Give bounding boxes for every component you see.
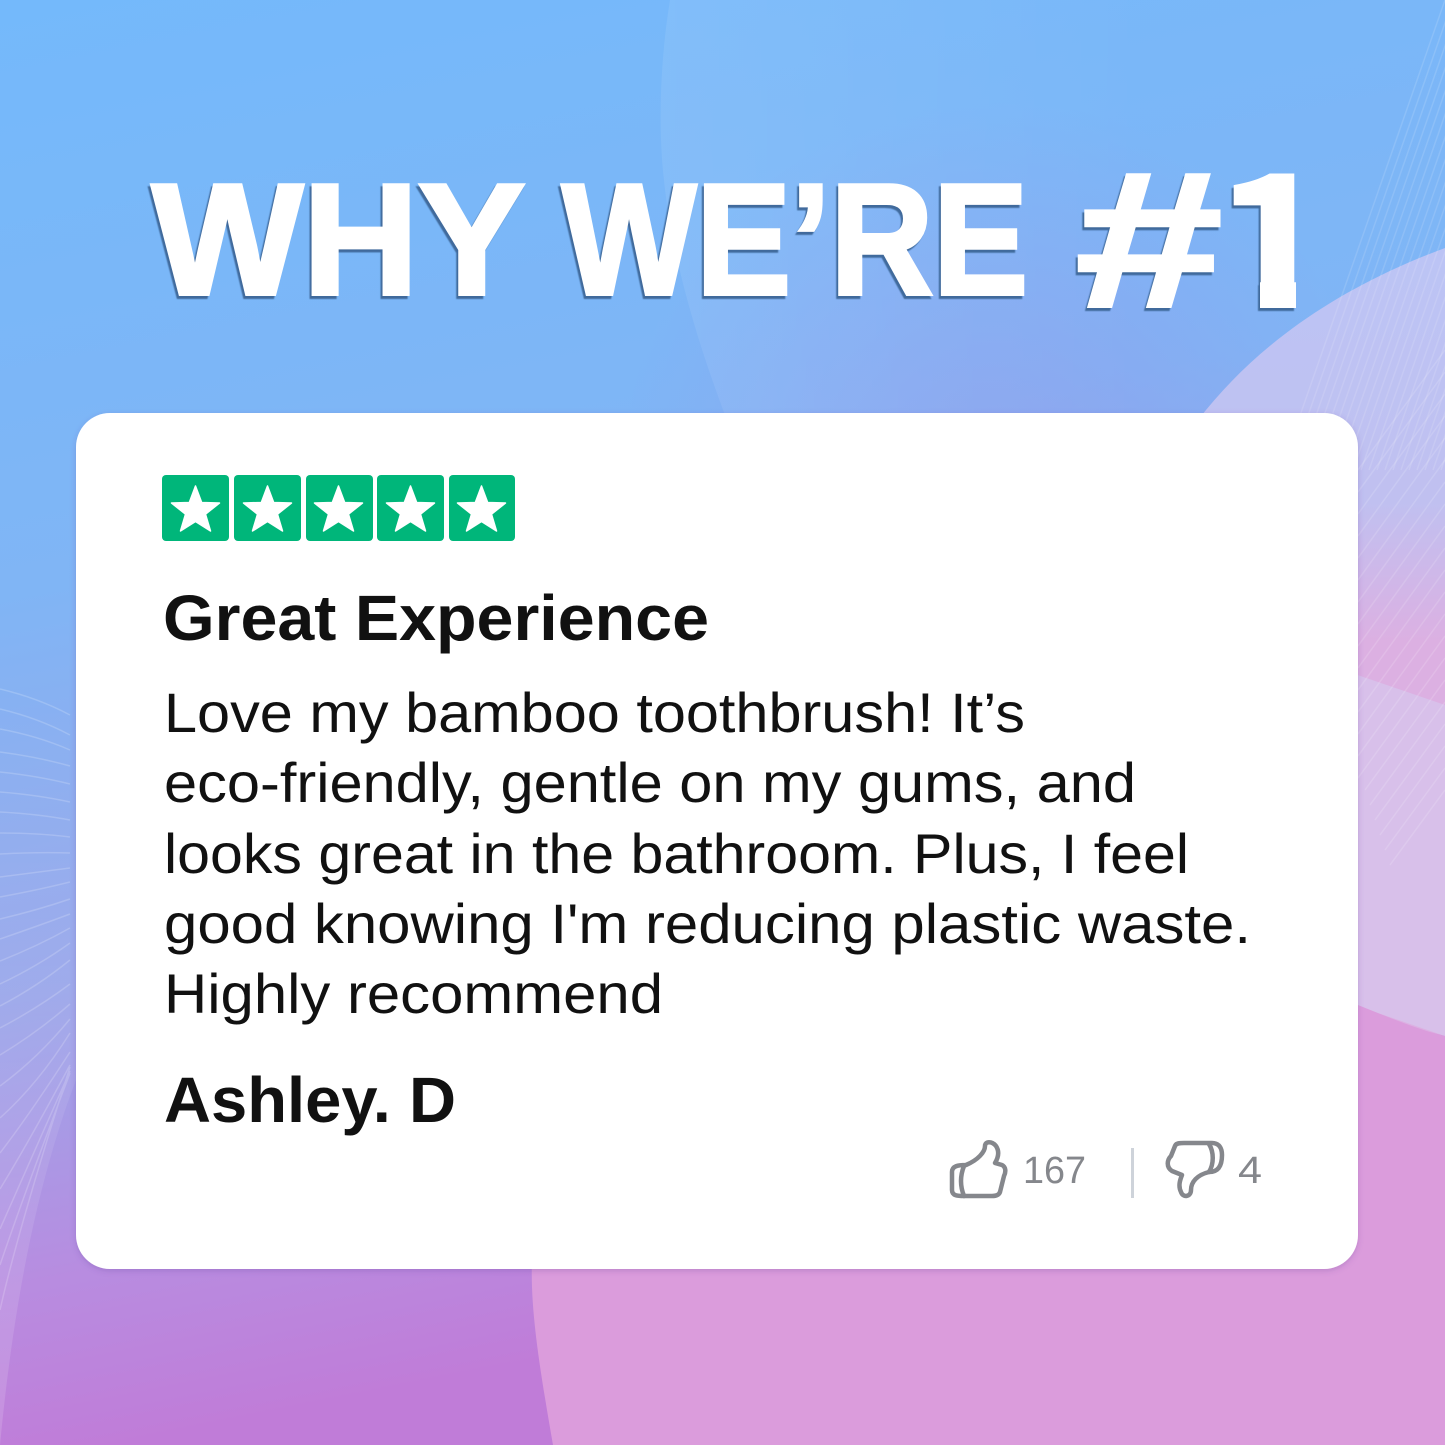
title text bbox=[150, 173, 1296, 308]
title shadow: WHY bbox=[150, 155, 523, 331]
background: bottom pink blob bbox=[532, 1005, 1445, 1445]
upvote count: 167 bbox=[1023, 1150, 1086, 1192]
background: right translucent blob bbox=[1198, 248, 1445, 1036]
review body text: good knowing I'm reducing plastic waste. bbox=[164, 892, 1251, 955]
card background bbox=[76, 413, 1358, 1269]
title shadow: # bbox=[1074, 135, 1220, 350]
background: purple glow behind card top bbox=[600, 100, 1445, 860]
title bbox=[147, 173, 1296, 312]
icon: five star rating bbox=[162, 475, 515, 541]
background: top right line pattern bbox=[1281, 0, 1445, 470]
review body text: looks great in the bathroom. Plus, I feel bbox=[164, 822, 1189, 885]
title text: WE’RE bbox=[562, 152, 1028, 328]
review heading: Great Experience bbox=[163, 582, 709, 654]
review body text: Love my bamboo toothbrush! It’s bbox=[164, 681, 1025, 744]
title text: 1 bbox=[1214, 97, 1332, 359]
downvote count: 4 bbox=[1238, 1150, 1262, 1192]
review body text bbox=[164, 681, 1251, 1025]
background: right side line pattern bbox=[1358, 350, 1445, 865]
title text: WHY bbox=[152, 152, 525, 328]
reviewer name: Ashley. D bbox=[164, 1064, 456, 1136]
icon: thumbs up bbox=[952, 1142, 1005, 1196]
title shadow bbox=[147, 176, 1294, 312]
divider bbox=[1131, 1148, 1134, 1198]
title shadow: WE’RE bbox=[560, 155, 1026, 331]
review body text: eco-friendly, gentle on my gums, and bbox=[164, 751, 1136, 814]
background: left line pattern bbox=[0, 689, 70, 1310]
panel: review card bbox=[76, 413, 1358, 1269]
title shadow: 1 bbox=[1212, 100, 1330, 362]
icon: thumbs down bbox=[1168, 1143, 1222, 1196]
review body text: Highly recommend bbox=[164, 962, 663, 1025]
background: upper translucent blob bbox=[661, 0, 1200, 420]
background: left fan glow bbox=[0, 690, 76, 1445]
title text: # bbox=[1076, 132, 1222, 347]
background: right lighter band bbox=[1340, 669, 1445, 1036]
